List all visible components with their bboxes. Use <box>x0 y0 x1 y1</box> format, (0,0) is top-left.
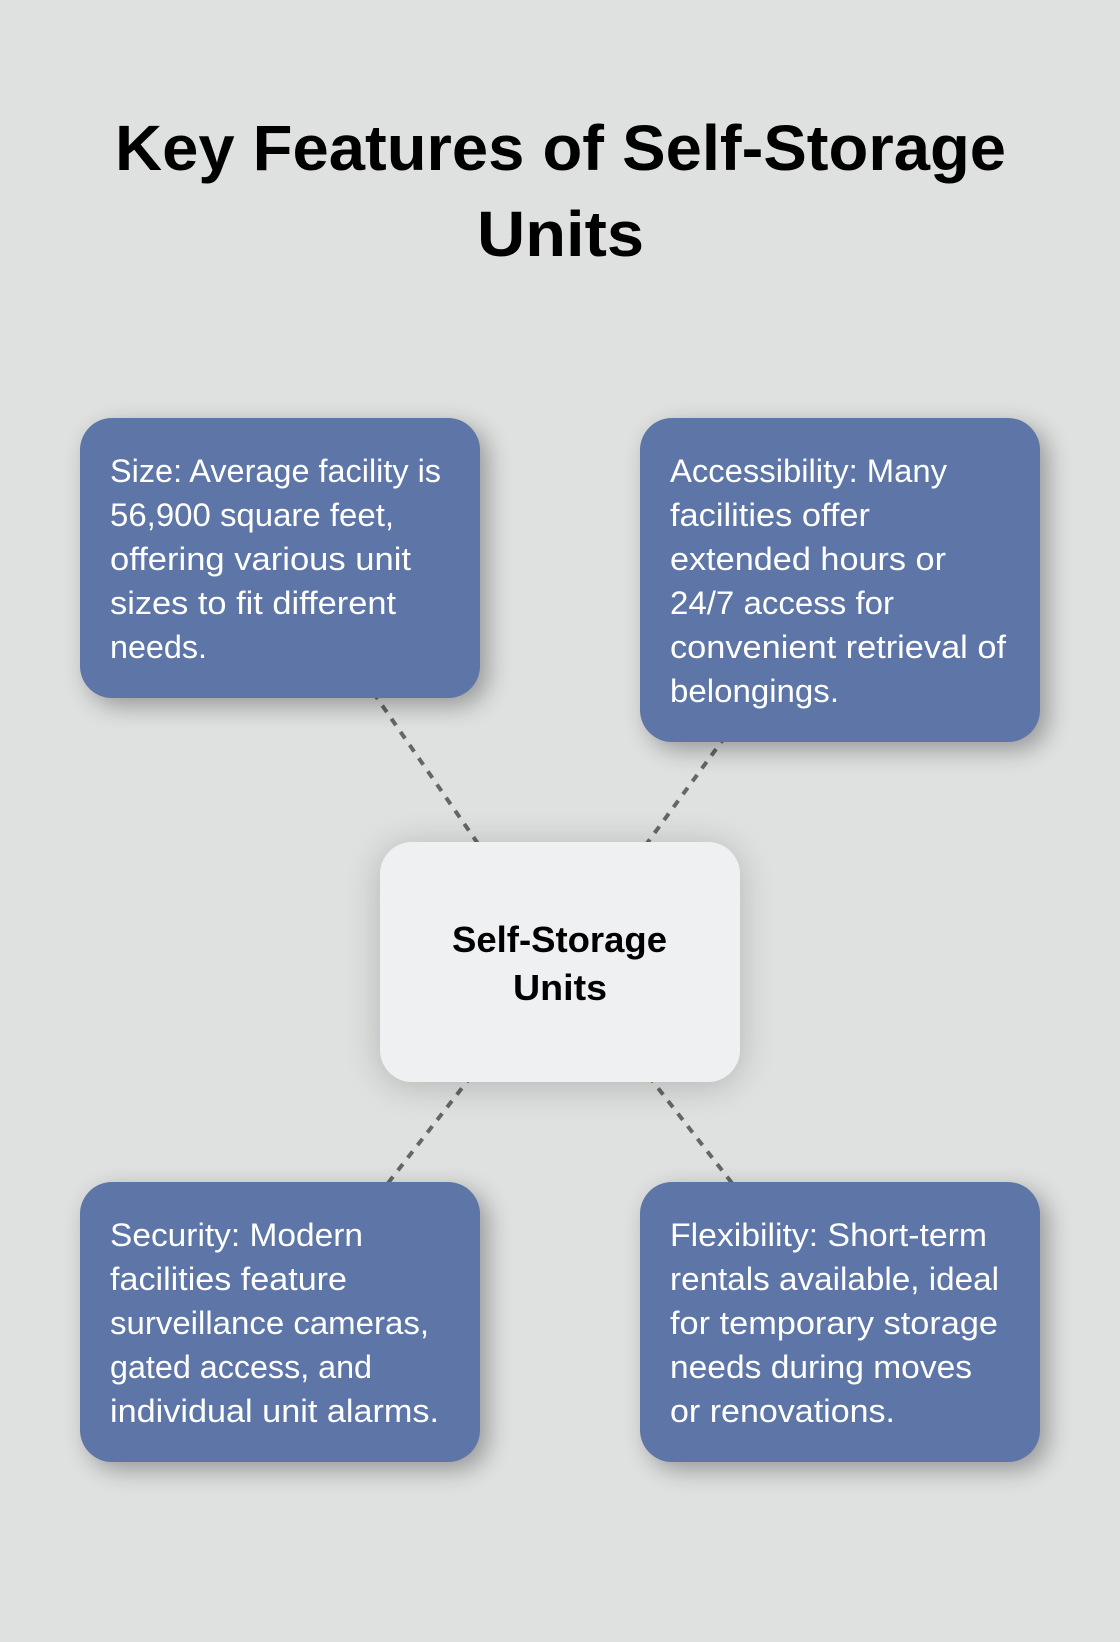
center node: self-storage units: Units <box>513 967 607 1008</box>
panel: accessibility card: convenient retrieval of <box>670 629 1006 665</box>
panel: accessibility card: belongings. <box>670 673 839 709</box>
panel: size card: Size: Average facility is <box>110 453 441 489</box>
panel: accessibility card: extended hours or <box>670 541 946 577</box>
title <box>115 112 1006 270</box>
panel: size card: 56,900 square feet, <box>110 497 394 533</box>
center node: self-storage units: Self-Storage <box>452 919 667 960</box>
panel: flexibility card <box>640 1182 1040 1462</box>
panel: security card: gated access, and <box>110 1349 372 1385</box>
panel: security card <box>80 1182 480 1462</box>
panel: flexibility card: Flexibility: Short-term <box>670 1217 987 1253</box>
panel: security card: Security: Modern <box>110 1217 363 1253</box>
panel: accessibility card: 24/7 access for <box>670 585 894 621</box>
panel: size card <box>80 418 480 698</box>
panel: accessibility card: Accessibility: Many <box>670 453 947 489</box>
center node: self-storage units <box>380 842 740 1082</box>
panel: security card: facilities feature <box>110 1261 347 1297</box>
panel: security card: surveillance cameras, <box>110 1305 429 1341</box>
panel: accessibility card <box>640 418 1040 742</box>
title: Units <box>477 198 644 270</box>
panel: size card: offering various unit <box>110 541 411 577</box>
panel: size card: sizes to fit different <box>110 585 396 621</box>
panel: flexibility card: for temporary storage <box>670 1305 998 1341</box>
panel: size card: needs. <box>110 629 207 665</box>
panel: flexibility card: or renovations. <box>670 1393 895 1429</box>
panel: flexibility card: rentals available, ideal <box>670 1261 999 1297</box>
panel: security card: individual unit alarms. <box>110 1393 439 1429</box>
title: Key Features of Self-Storage <box>115 112 1006 184</box>
panel: accessibility card: facilities offer <box>670 497 870 533</box>
panel: flexibility card: needs during moves <box>670 1349 972 1385</box>
